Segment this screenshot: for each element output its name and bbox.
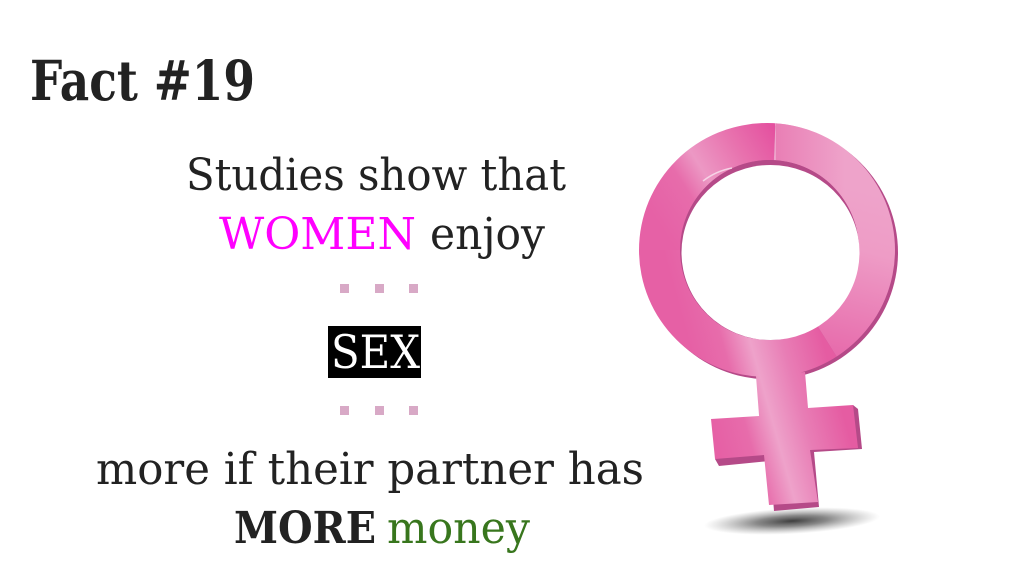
text: more money: MORE (234, 503, 376, 554)
icon: female symbol (630, 110, 905, 539)
icon extrusion (642, 126, 898, 511)
stem (756, 372, 818, 505)
text: more money: money (387, 503, 530, 554)
text: women enjoy: WOMEN (219, 209, 416, 260)
text: women enjoy: enjoy (430, 209, 545, 260)
cross (711, 405, 858, 459)
dots: upper separator (340, 284, 418, 293)
highlighted word: sex: SEX (331, 325, 420, 379)
text: more if their partner has: more if their partner has (96, 444, 644, 495)
text: studies show that: Studies show that (186, 150, 566, 201)
infographic (32, 59, 898, 553)
text: women enjoy (219, 209, 545, 260)
inner rim (680, 160, 860, 340)
title: Fact #19 (30, 48, 255, 113)
dots: lower separator (340, 406, 418, 415)
icon shadow (703, 503, 881, 539)
ring (639, 123, 895, 376)
text: more money (234, 503, 530, 554)
